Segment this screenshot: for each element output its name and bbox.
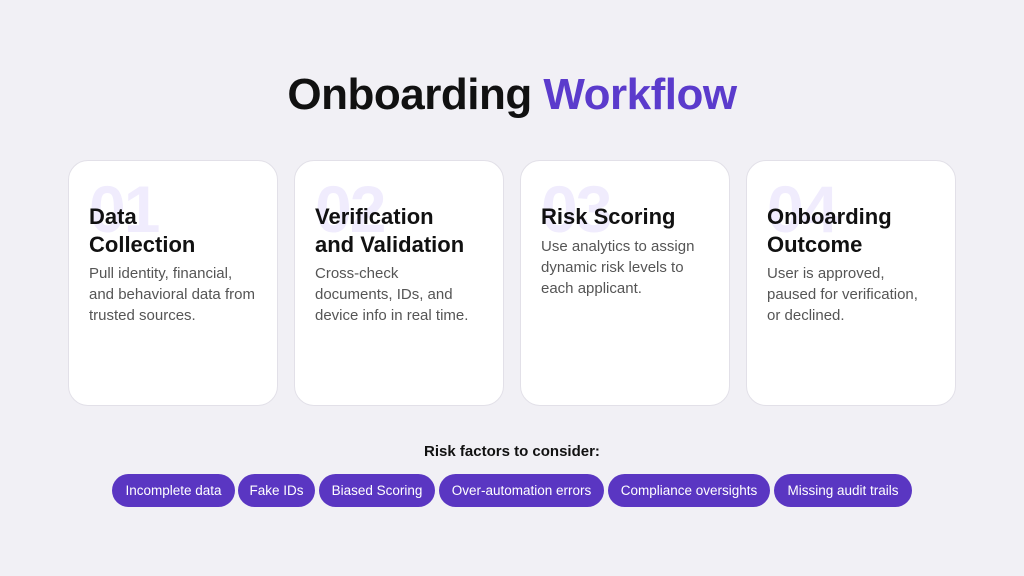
pill: Fake IDs — [249, 483, 304, 498]
text: documents, IDs, and — [315, 286, 453, 303]
text: Use analytics to assign — [541, 238, 694, 255]
card 2 — [294, 160, 504, 406]
number: 03 — [541, 172, 610, 246]
pill: Missing audit trails — [787, 483, 899, 498]
text — [315, 265, 468, 324]
pill — [774, 474, 912, 507]
text — [541, 238, 694, 297]
title: Onboarding Workflow — [287, 70, 737, 119]
risk factors heading: Risk factors to consider: — [424, 443, 600, 460]
text: and behavioral data from — [89, 286, 255, 303]
heading: and Validation — [315, 232, 464, 257]
heading — [767, 204, 892, 257]
text — [89, 265, 255, 324]
pill — [319, 474, 435, 507]
pill — [112, 474, 235, 507]
text: Pull identity, financial, — [89, 265, 232, 282]
heading: Verification — [315, 204, 434, 229]
heading: Onboarding — [767, 204, 892, 229]
text: Cross-check — [315, 265, 398, 282]
number: 04 — [767, 172, 836, 246]
card 4 — [746, 160, 956, 406]
heading: Outcome — [767, 232, 862, 257]
pill: Incomplete data — [125, 483, 222, 498]
heading — [89, 204, 195, 257]
text: trusted sources. — [89, 307, 196, 324]
number: 01 — [89, 172, 158, 246]
text: paused for verification, — [767, 286, 918, 303]
text — [767, 265, 918, 324]
text: or declined. — [767, 307, 845, 324]
heading: Collection — [89, 232, 195, 257]
pill — [608, 474, 770, 507]
pill: Biased Scoring — [332, 483, 422, 498]
card 1 — [68, 160, 278, 406]
heading — [315, 204, 464, 257]
text: each applicant. — [541, 280, 642, 297]
card 3 — [520, 160, 730, 406]
pill: Over-automation errors — [452, 483, 591, 498]
text: dynamic risk levels to — [541, 259, 684, 276]
text: User is approved, — [767, 265, 885, 282]
pill — [238, 474, 315, 507]
pill: Compliance oversights — [621, 483, 757, 498]
heading: Data — [89, 204, 137, 229]
number: 02 — [315, 172, 384, 246]
pill — [439, 474, 604, 507]
text: device info in real time. — [315, 307, 468, 324]
heading: Risk Scoring — [541, 204, 675, 229]
